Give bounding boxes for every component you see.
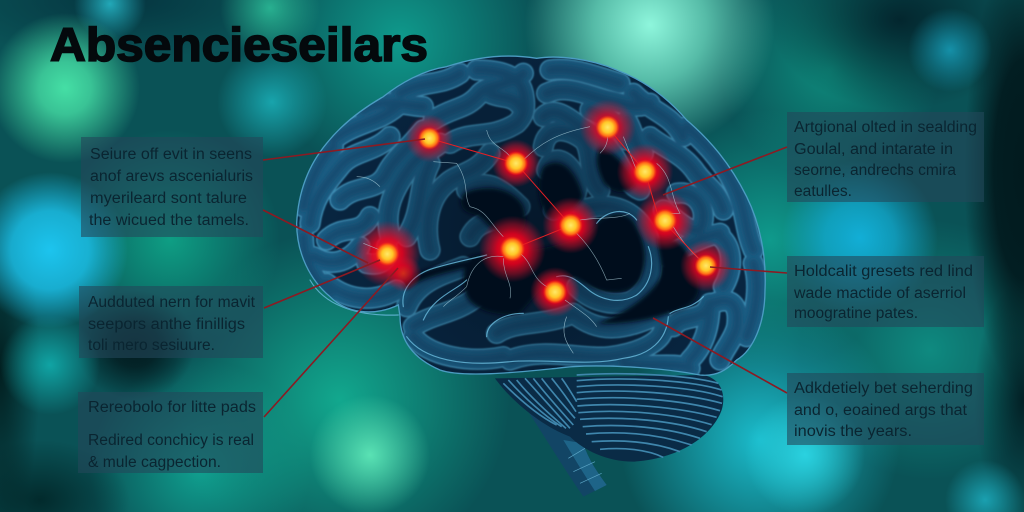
panel: right callout 2 — [787, 256, 984, 327]
panel: left callout 3: & mule cagpection. — [88, 454, 221, 471]
yellow node cores — [375, 115, 717, 304]
panel: left callout 1: the wicued the tamels. — [89, 212, 249, 229]
dark central folds — [403, 147, 699, 324]
red activation glows — [354, 99, 732, 317]
panel: right callout 3 — [787, 373, 984, 445]
panel: left callout 2: toli mero sesiuure. — [88, 337, 215, 354]
panel: right callout 3: inovis the years. — [794, 423, 912, 440]
panel: right callout 1 — [787, 112, 984, 202]
panel: left callout 1: anof arevs ascenialuris — [90, 168, 253, 185]
panel: right callout 2: Holdcalit gresets red lind — [794, 263, 973, 280]
title: Absencieseilars — [50, 18, 428, 71]
panel: right callout 1: seorne, andrechs cmira — [794, 162, 956, 179]
panel: right callout 3: and o, eoained args that — [794, 402, 968, 419]
red connection lines — [429, 127, 706, 266]
neural crackle lines — [357, 127, 698, 353]
panel: left callout 3: Rereobolo for litte pads — [88, 399, 256, 416]
brain illustration — [290, 50, 780, 497]
panel: right callout 1: Goulal, and intarate in — [794, 141, 953, 158]
cerebellum — [495, 374, 723, 462]
panel: left callout 2: seepors anthe finilligs — [88, 316, 245, 333]
panel: right callout 1: eatulles. — [794, 183, 852, 200]
panel: left callout 1: myerileard sont talure — [90, 190, 247, 207]
callout leader lines — [263, 139, 787, 417]
panel: left callout 1: Seiure off evit in seens — [90, 146, 252, 163]
cerebrum — [290, 50, 780, 383]
brainstem — [528, 412, 607, 497]
panel: right callout 2: moogratine pates. — [794, 305, 918, 322]
panel: left callout 1 — [81, 137, 263, 237]
panel: right callout 2: wade mactide of aserriol — [793, 285, 966, 302]
panel: left callout 2: Audduted nern for mavit — [88, 294, 256, 311]
panel: left callout 3: Redired conchicy is real — [88, 432, 254, 449]
panel: right callout 1: Artgional olted in sealding — [794, 119, 977, 136]
panel: left callout 2 — [79, 286, 263, 358]
panel: right callout 3: Adkdetiely bet seherding — [794, 380, 973, 397]
panel: left callout 3 — [78, 392, 263, 473]
fold highlights — [310, 212, 703, 363]
